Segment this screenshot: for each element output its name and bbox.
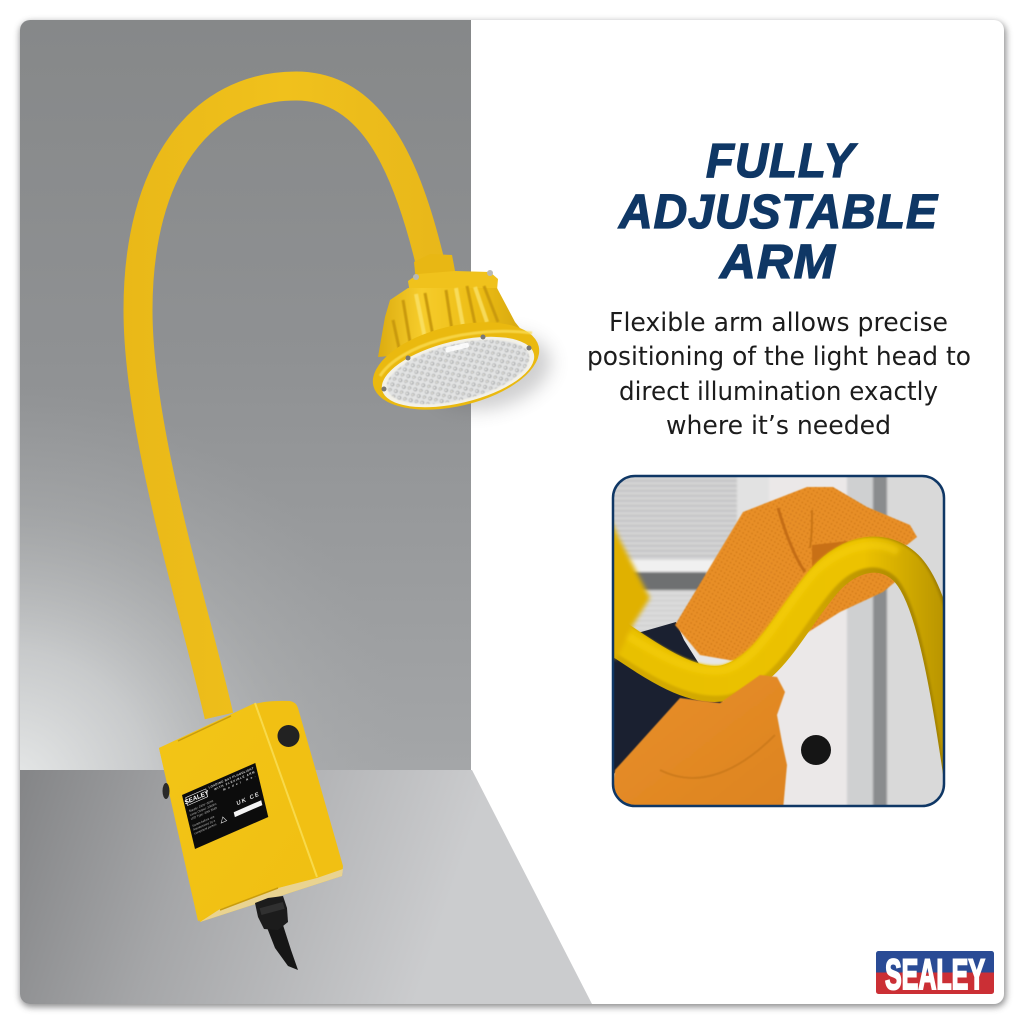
body text: positioning of the light head to (587, 342, 971, 372)
junction box (159, 701, 343, 970)
rating label (182, 763, 268, 849)
rating label: competent person (194, 822, 217, 836)
arm (138, 86, 431, 716)
rating label: LOADING BAY FLOODLIGHT (208, 766, 254, 790)
panel: studio backdrop (20, 20, 592, 1004)
inset photo: hands bending the arm (605, 470, 962, 815)
heading: FULLY (706, 135, 858, 188)
rating label: UK CE (236, 792, 260, 807)
rating label: Lamp Output: 3000lm (189, 802, 217, 817)
knobs (278, 725, 300, 747)
wall hole (801, 735, 831, 765)
dark sleeve (613, 622, 725, 775)
rating label: Maintenance by a (193, 818, 216, 832)
upper glove (675, 487, 917, 662)
light head (364, 254, 559, 425)
rating label: Model No. (223, 774, 256, 792)
rating label: Supply: 230V~50Hz (188, 799, 214, 813)
cable and gland (255, 896, 298, 970)
LED lens (380, 328, 536, 416)
rating label: Isolate before use (192, 814, 215, 828)
heading: ARM (719, 236, 836, 289)
arm tube (605, 545, 962, 780)
heading (618, 135, 939, 289)
rating label: WITH FLEXIBLE ARM (214, 770, 255, 792)
body text (587, 308, 971, 441)
lower glove (610, 675, 787, 810)
heading: ADJUSTABLE (618, 186, 939, 239)
rating label: LED Type: 30W SMD (190, 805, 218, 821)
blurred yellow head in foreground (610, 518, 650, 658)
rating label: SEALEY (184, 789, 210, 807)
logo: Sealey (876, 951, 994, 994)
body text: direct illumination exactly (619, 377, 938, 407)
product: flood light on flexible arm (138, 86, 559, 970)
body text: where it’s needed (666, 411, 891, 441)
body text: Flexible arm allows precise (609, 308, 948, 338)
